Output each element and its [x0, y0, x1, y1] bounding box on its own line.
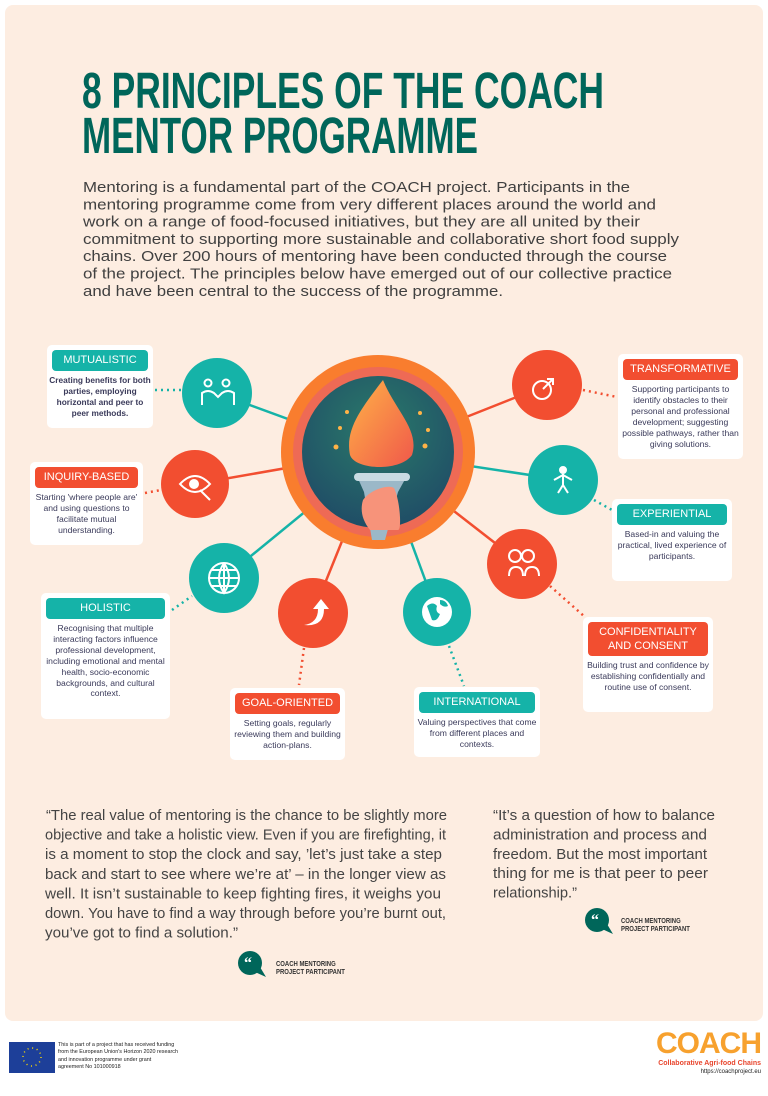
intro text: Mentoring is a fundamental part of the COACH project. Participants in the — [83, 179, 630, 196]
box: goal-oriented: GOAL-ORIENTED — [242, 697, 333, 709]
box: transformative: Supporting participants to identify obstacles to their personal and professional development; suggesting possible pathways, rather than giving solutions. — [622, 384, 739, 449]
box: mutualistic — [47, 345, 153, 428]
intro text: commitment to supporting more sustainable and collaborative short food supply — [83, 231, 680, 248]
quote left: down. You have to find a way through before you’re burnt out, — [45, 905, 446, 922]
box: confidentiality and consent: AND CONSENT — [608, 640, 688, 652]
quote right — [493, 807, 715, 902]
box: transformative — [618, 354, 743, 459]
circles with icons — [161, 350, 598, 648]
attribution left — [276, 961, 345, 976]
footer funding text: This is part of a project that has received funding from the European Union's Horizon 2020 research and innovation programme under grant agreement No 101000918 — [58, 1042, 178, 1070]
COACH logo: COACH — [656, 1027, 761, 1060]
box: goal-oriented: Setting goals, regularly reviewing them and building action-plans. — [234, 718, 341, 750]
box: inquiry-based: INQUIRY-BASED — [44, 471, 129, 483]
attribution right — [621, 918, 690, 933]
attribution left: PROJECT PARTICIPANT — [276, 969, 345, 976]
box: international — [414, 687, 540, 757]
quote right: administration and process and — [493, 826, 707, 843]
COACH logo: Collaborative Agri-food Chains — [658, 1060, 761, 1067]
box: holistic — [41, 593, 170, 719]
box: experiential: EXPERIENTIAL — [633, 508, 711, 520]
title: MENTOR PROGRAMME — [82, 107, 478, 164]
box: confidentiality and consent: CONFIDENTIALITY — [599, 626, 697, 638]
quote left: well. It isn’t sustainable to keep fighting fires, it weighs you — [44, 885, 441, 902]
box: confidentiality and consent — [583, 617, 713, 712]
quote right: freedom. But the most important — [493, 846, 708, 863]
box: transformative: TRANSFORMATIVE — [630, 363, 731, 375]
box: international: Valuing perspectives that come from different places and contexts. — [418, 717, 536, 749]
attribution right: PROJECT PARTICIPANT — [621, 926, 690, 933]
box: goal-oriented — [230, 688, 345, 760]
COACH logo: https://coachproject.eu — [701, 1069, 761, 1075]
intro text: work on a range of food-focused initiatives, but they are all united by their — [82, 214, 640, 231]
quote attribution icons: “ — [591, 912, 599, 929]
box: confidentiality and consent: Building trust and confidence by establishing confidentially and routine use of consent. — [587, 660, 709, 692]
quote attribution icons: “ — [244, 955, 252, 972]
quote left — [44, 807, 447, 942]
title — [82, 62, 604, 164]
box: mutualistic: MUTUALISTIC — [63, 354, 137, 366]
intro text — [82, 179, 680, 300]
intro text: of the project. The principles below have emerged out of our collective practice — [83, 266, 672, 282]
box: mutualistic: Creating benefits for both parties, employing horizontal and peer to peer methods. — [49, 375, 151, 418]
quote left: objective and take a holistic view. Even if you are firefighting, it — [45, 827, 447, 844]
box: international: INTERNATIONAL — [433, 696, 521, 708]
intro text: chains. Over 200 hours of mentoring have been conducted through the course — [83, 248, 667, 265]
box: inquiry-based: Starting 'where people are' and using questions to facilitate mutual understanding. — [36, 492, 137, 535]
quote right: “It’s a question of how to balance — [493, 807, 715, 824]
intro text: and have been central to the success of the programme. — [83, 283, 503, 300]
intro text: mentoring programme come from very different places around the world and — [83, 196, 656, 213]
box: experiential: Based-in and valuing the practical, lived experience of participants. — [618, 529, 726, 561]
quote left: you’ve got to find a solution.” — [45, 925, 238, 942]
box: inquiry-based — [30, 462, 143, 545]
attribution left: COACH MENTORING — [276, 961, 336, 968]
box: holistic: Recognising that multiple interacting factors influence professional development, including emotional and mental health, socio-economic backgrounds, and cultural context. — [46, 623, 165, 698]
quote right: thing for me is that peer to peer — [493, 865, 708, 882]
quote right: relationship.” — [493, 885, 577, 902]
quote left: “The real value of mentoring is the chance to be slightly more — [46, 807, 447, 824]
box: experiential — [612, 499, 732, 581]
box: holistic: HOLISTIC — [80, 602, 131, 614]
quote attribution icons — [238, 908, 613, 977]
COACH logo — [656, 1027, 761, 1075]
quote left: back and start to see where we’re at’ – in the longer view as — [45, 866, 446, 883]
center torch emblem — [281, 355, 475, 549]
attribution right: COACH MENTORING — [621, 918, 681, 925]
EU flag — [9, 1042, 55, 1073]
quote left: is a moment to stop the clock and say, ’let’s just take a step — [45, 846, 442, 863]
